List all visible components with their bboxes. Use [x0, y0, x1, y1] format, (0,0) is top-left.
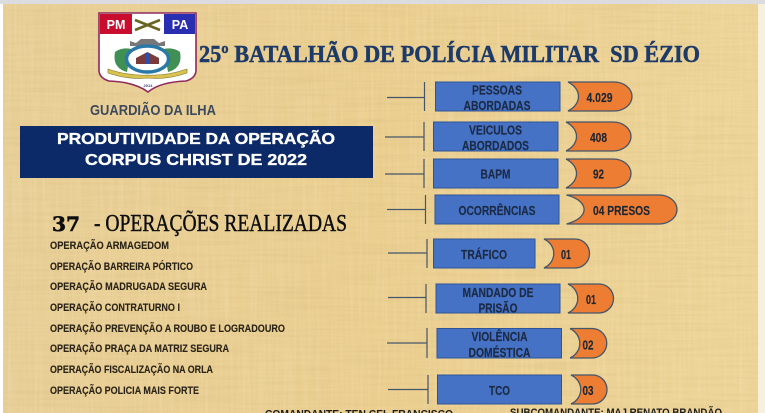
row: mandado de prisão 01: [388, 284, 614, 316]
row: bapm 92: BAPM: [480, 168, 510, 182]
icon: police shield logo: 2014: [144, 83, 153, 88]
row: tráfico 01: [388, 239, 590, 268]
heading: 37 operações realizadas: - OPERAÇÕES REALIZADAS: [94, 210, 347, 237]
list: operações: OPERAÇÃO BARREIRA PÓRTICO: [50, 260, 193, 273]
icon: police shield logo: PA: [172, 18, 188, 32]
row: veiculos abordados 408: VEICULOS: [469, 124, 522, 138]
title: 25º BATALHÃO DE POLÍCIA MILITAR SD ÉZIO: [199, 42, 700, 68]
row: veiculos abordados 408: ABORDADOS: [462, 139, 529, 153]
heading: 37 operações realizadas: 37: [52, 212, 80, 236]
banner: produtividade da operação: PRODUTIVIDADE DA OPERAÇÃO: [57, 130, 335, 148]
list: operações: OPERAÇÃO FISCALIZAÇÃO NA ORLA: [50, 363, 213, 376]
row: bapm 92: [385, 159, 631, 188]
row: violência doméstica 02: [387, 328, 607, 360]
row: mandado de prisão 01: MANDADO DE: [462, 286, 534, 300]
list: operações: OPERAÇÃO POLICIA MAIS FORTE: [50, 384, 199, 397]
row: ocorrências 04 presos: OCORRÊNCIAS: [458, 203, 536, 218]
heading: 37 operações realizadas: [52, 210, 347, 237]
banner: produtividade da operação: CORPUS CHRIST DE 2022: [85, 152, 307, 169]
row: ocorrências 04 presos: 04 PRESOS: [593, 204, 650, 218]
row: pessoas abordadas 4.029: PESSOAS: [472, 84, 522, 98]
row: bapm 92: 92: [593, 168, 604, 182]
row: tco 03: 03: [582, 384, 594, 398]
row: pessoas abordadas 4.029: 4.029: [586, 91, 613, 105]
list: operações: [50, 239, 285, 397]
row: violência doméstica 02: 02: [582, 338, 594, 352]
row: tco 03: [388, 375, 607, 404]
row: violência doméstica 02: VIOLÊNCIA: [472, 329, 528, 344]
banner: produtividade da operação: [20, 126, 373, 178]
subtitle: guardião da ilha: GUARDIÃO DA ILHA: [90, 101, 216, 119]
list: operações: OPERAÇÃO ARMAGEDOM: [50, 239, 169, 252]
row: pessoas abordadas 4.029: ABORDADAS: [464, 99, 530, 113]
icon: police shield logo: [99, 13, 196, 92]
row: ocorrências 04 presos: [387, 195, 677, 224]
row: tráfico 01: 01: [561, 248, 571, 262]
list: operações: OPERAÇÃO CONTRATURNO I: [50, 301, 180, 314]
list: operações: OPERAÇÃO PREVENÇÃO A ROUBO E LOGRADOURO: [50, 322, 285, 335]
row: mandado de prisão 01: PRISÃO: [478, 300, 518, 316]
row: veiculos abordados 408: [385, 122, 631, 153]
row: tco 03: TCO: [489, 384, 510, 398]
icon: police shield logo: PM: [107, 18, 125, 32]
row: mandado de prisão 01: 01: [586, 293, 596, 307]
list: operações: OPERAÇÃO PRAÇA DA MATRIZ SEGURA: [50, 342, 229, 355]
row: pessoas abordadas 4.029: [387, 82, 632, 113]
row: violência doméstica 02: DOMÉSTICA: [468, 345, 530, 360]
row: veiculos abordados 408: 408: [590, 131, 607, 145]
list: operações: OPERAÇÃO MADRUGADA SEGURA: [50, 280, 207, 293]
row: tráfico 01: TRÁFICO: [461, 247, 507, 262]
